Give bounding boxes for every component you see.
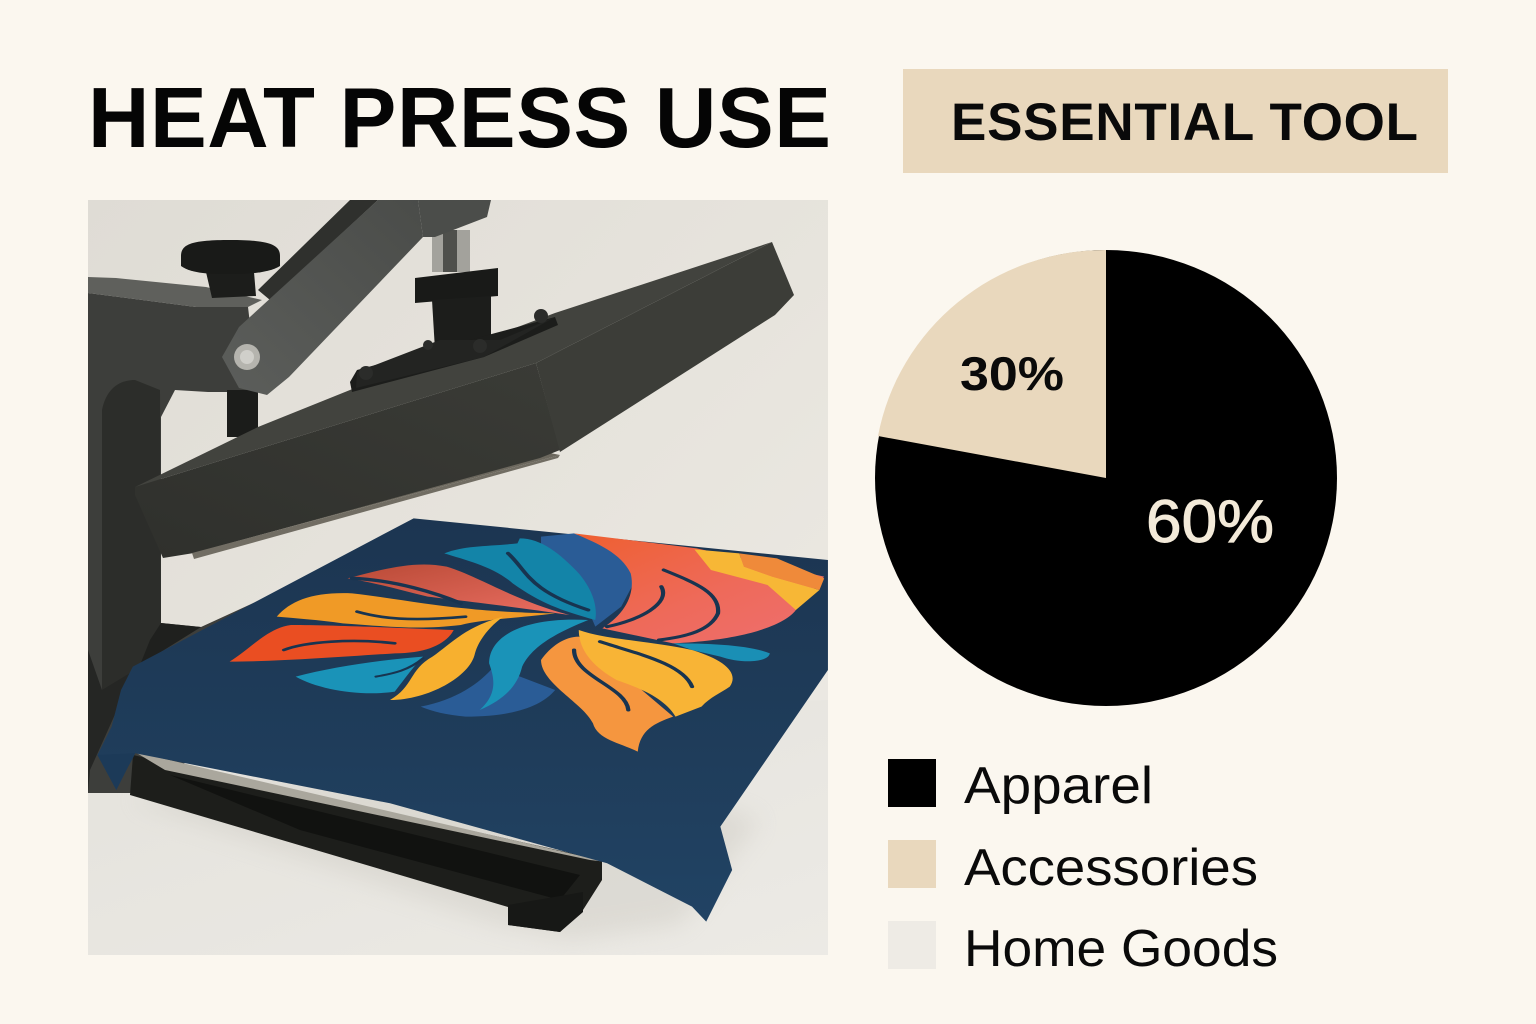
pressure piston	[415, 230, 498, 352]
title: HEAT PRESS USE	[88, 71, 831, 166]
press frame top face	[88, 277, 262, 307]
badge: essential tool	[903, 69, 1448, 173]
label: 30%: 30%	[960, 347, 1064, 400]
label: 60%: 60%	[1146, 488, 1274, 555]
print	[230, 533, 824, 752]
lever arm front	[222, 200, 423, 395]
photo: heat press with printed shirt	[88, 200, 828, 955]
press column and base	[88, 293, 255, 793]
legend: apparel: Apparel	[964, 757, 1153, 815]
threaded bolt	[227, 390, 258, 437]
base shadow on floor	[178, 784, 746, 937]
pivot pin	[234, 344, 260, 370]
shirt	[97, 518, 828, 922]
legend: accessories: Accessories	[964, 839, 1258, 897]
foot	[508, 910, 583, 932]
legend: apparel	[888, 757, 1153, 815]
lever arm back	[258, 200, 378, 300]
lower press bed	[130, 755, 602, 932]
legend: home goods: Home Goods	[964, 920, 1278, 978]
knob	[181, 240, 280, 298]
legend	[888, 757, 1278, 978]
badge: essential tool: ESSENTIAL TOOL	[951, 93, 1418, 152]
shirt and print	[97, 518, 828, 922]
heat pad strip	[135, 752, 607, 862]
upper heat platen	[135, 242, 794, 559]
mounting plate and screws	[350, 309, 558, 392]
pie chart	[875, 250, 1337, 706]
